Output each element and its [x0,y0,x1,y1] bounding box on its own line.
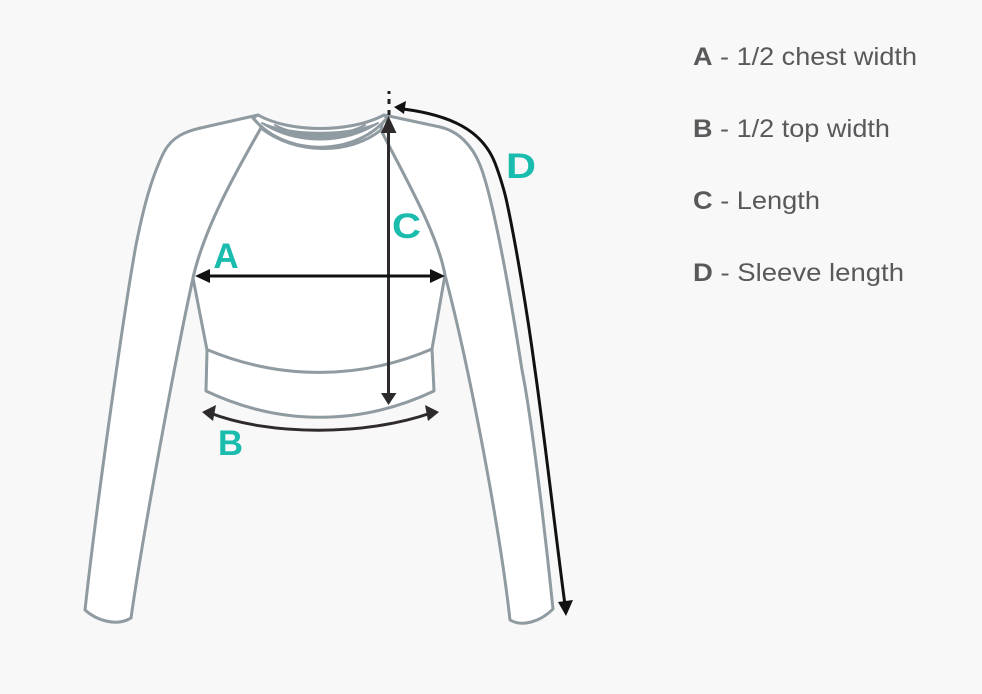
left sleeve [85,115,261,622]
legend item D: D - Sleeve length [693,259,904,287]
hem band seam [208,349,432,372]
letter C: C [392,207,421,246]
arrow B: top width [202,405,439,430]
letter D: D [506,147,536,186]
garment: long sleeve crop top [85,115,553,623]
dotted reference line [388,91,390,115]
legend item C: C - Length [693,187,820,215]
legend item B: B - 1/2 top width [693,115,890,143]
arrow A: chest width [195,269,445,283]
arrow D: sleeve length [394,101,573,616]
letter B: B [218,424,243,463]
legend [693,43,917,287]
collar [253,115,387,147]
legend item A: A - 1/2 chest width [693,43,917,71]
right sleeve [381,115,553,623]
body [193,128,445,417]
letter A: A [213,237,239,276]
arrow C: length [381,116,396,405]
